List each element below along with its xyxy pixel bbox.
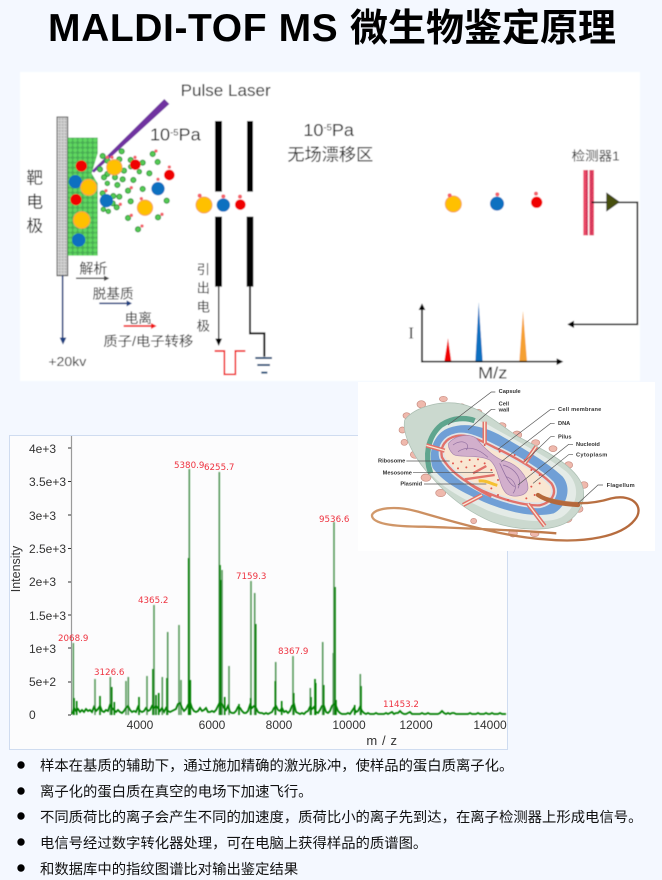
- peak labels: 2068.9: [58, 634, 88, 644]
- panel: mass spectrum chart: [9, 436, 508, 750]
- desorption label and arrow: 解析: [79, 261, 107, 277]
- target electrode label: 靶: [26, 168, 43, 187]
- y axis: 3e+3: [29, 509, 56, 523]
- sample ions on target: [69, 160, 97, 247]
- drift zone pressure label: Pa: [332, 120, 354, 140]
- x axis title: m / z: [366, 733, 398, 748]
- mesosome: [465, 466, 495, 497]
- bullet 3: 不同质荷比的离子会产生不同的加速度，质荷比小的离子先到达，在离子检测器上形成电信号。: [40, 809, 642, 826]
- panel: MALDI-TOF schematic: [20, 72, 640, 382]
- matrix block: [68, 138, 98, 256]
- drifting ions: [445, 192, 542, 212]
- peak labels: 5380.9: [174, 461, 204, 471]
- pressure label: Pa: [179, 125, 201, 145]
- cell part labels: DNA: [558, 421, 570, 427]
- blue wall layer: [431, 425, 568, 515]
- y axis: 1.5e+3: [29, 609, 66, 623]
- desorbed ions: [100, 159, 175, 215]
- ions in extraction gap: [196, 194, 246, 213]
- cell part labels: Cytoplasm: [576, 452, 607, 458]
- mini spectrum: M/z: [478, 363, 507, 382]
- bullet list: [17, 758, 642, 878]
- target electrode label: 极: [26, 216, 43, 235]
- drift tube and detector section: [408, 149, 637, 382]
- outer wall stripe: [427, 418, 576, 521]
- x axis labels: 4000: [127, 718, 154, 732]
- ionization label and arrow: [103, 310, 194, 349]
- peak labels: 6255.7: [204, 463, 234, 473]
- bullet 1: 样本在基质的辅助下，通过施加精确的激光脉冲，使样品的蛋白质离子化。: [40, 758, 513, 774]
- cell part labels: Flagellum: [607, 483, 635, 489]
- peak labels: [58, 461, 419, 710]
- extraction electrode plates: [215, 121, 253, 287]
- pressure label: -5: [170, 127, 179, 137]
- cell part labels: Capsule: [499, 389, 521, 395]
- ionization label and arrow: 电离: [125, 310, 152, 326]
- ionization label and arrow: 质子/电子转移: [103, 334, 194, 349]
- x axis labels: 12000: [399, 718, 433, 732]
- amplifier and signal line: [567, 193, 637, 328]
- spectrum trace: [72, 469, 506, 715]
- bullet 4: 电信号经过数字转化器处理，可在电脑上获得样品的质谱图。: [40, 835, 427, 852]
- membrane outline: [441, 435, 554, 505]
- target electrode label: [26, 168, 43, 235]
- surface bumps: [399, 396, 588, 537]
- y axis: 5e+2: [29, 675, 56, 689]
- desorption label and arrow: [76, 261, 109, 281]
- y axis: 2e+3: [29, 575, 56, 589]
- y axis title: Intensity: [9, 545, 23, 592]
- flagellum: [372, 495, 639, 540]
- cell part labels: Ribosome: [378, 459, 405, 465]
- y axis: [29, 436, 72, 722]
- cell membrane and cytoplasm: [441, 435, 554, 505]
- peak labels: 7159.3: [236, 572, 266, 582]
- y axis: 0: [29, 708, 36, 722]
- bullet 5: 和数据库中的指纹图谱比对输出鉴定结果: [40, 861, 298, 878]
- laser beam: [92, 99, 169, 173]
- extraction electrode label: 引: [197, 262, 210, 277]
- protons: [104, 149, 171, 228]
- electrode wire and pulse: [217, 287, 221, 340]
- title: 微生物鉴定原理: [350, 8, 616, 50]
- voltage label: +20kv: [48, 355, 87, 369]
- peak labels: 3126.6: [94, 668, 124, 678]
- voltage arrow: [60, 276, 65, 339]
- pressure label: 10: [150, 125, 170, 145]
- peak labels: 9536.6: [319, 515, 349, 525]
- peak labels: 4365.2: [138, 596, 168, 606]
- ion source section: [26, 81, 373, 374]
- y axis: 1e+3: [29, 642, 56, 656]
- x axis labels: 14000: [473, 718, 507, 732]
- matrix removal label and arrow: 脱基质: [93, 285, 134, 301]
- y axis: 4e+3: [29, 442, 56, 456]
- cell part labels: Nucleoid: [576, 442, 600, 448]
- pulse laser label: Pulse Laser: [181, 81, 271, 100]
- extraction electrode label: 出: [197, 281, 210, 296]
- y axis: 3.5e+3: [29, 475, 66, 489]
- cytoplasm ribosomes: [452, 444, 541, 501]
- peak labels: 11453.2: [383, 700, 419, 710]
- x axis labels: 10000: [332, 718, 366, 732]
- capsule: [404, 403, 584, 529]
- cell part labels: Mesosome: [383, 471, 412, 477]
- x axis labels: 8000: [266, 718, 293, 732]
- mini spectrum: I: [408, 324, 414, 343]
- detector plates: [583, 170, 594, 235]
- drift zone pressure label: 10: [303, 120, 323, 140]
- extraction electrode label: 电: [197, 299, 210, 314]
- panel: bacterium cell diagram: [358, 382, 655, 551]
- x axis labels: 6000: [199, 718, 226, 732]
- drift zone label: 无场漂移区: [287, 146, 373, 165]
- cell part labels: Pilus: [558, 434, 572, 440]
- cell part labels: Plasmid: [400, 482, 423, 488]
- plasmid: [479, 481, 497, 485]
- detector label: 检测器1: [572, 149, 620, 164]
- target electrode: [57, 117, 68, 276]
- drift zone pressure label: -5: [323, 123, 332, 133]
- title: MALDI-TOF MS: [48, 7, 338, 50]
- cell part labels: Cell membrane: [558, 407, 601, 413]
- target electrode label: 电: [26, 192, 43, 211]
- y axis: 2.5e+3: [29, 542, 66, 556]
- bullet 2: 离子化的蛋白质在真空的电场下加速飞行。: [40, 782, 313, 800]
- mini spectrum: [408, 302, 563, 382]
- extraction electrode label: [197, 262, 210, 333]
- ground symbol: [250, 287, 272, 373]
- green cell wall arc: [428, 419, 475, 473]
- nucleoid: [449, 436, 528, 496]
- cell part labels: Cell: [499, 402, 509, 408]
- desorbed plume: [97, 149, 169, 232]
- cell part labels: wall: [498, 407, 510, 413]
- peak labels: 8367.9: [278, 647, 308, 657]
- x axis labels: [127, 718, 507, 732]
- extraction electrode label: 极: [197, 318, 210, 333]
- leader lines: [406, 392, 603, 503]
- pili: [426, 422, 545, 526]
- cell part labels: [378, 389, 635, 489]
